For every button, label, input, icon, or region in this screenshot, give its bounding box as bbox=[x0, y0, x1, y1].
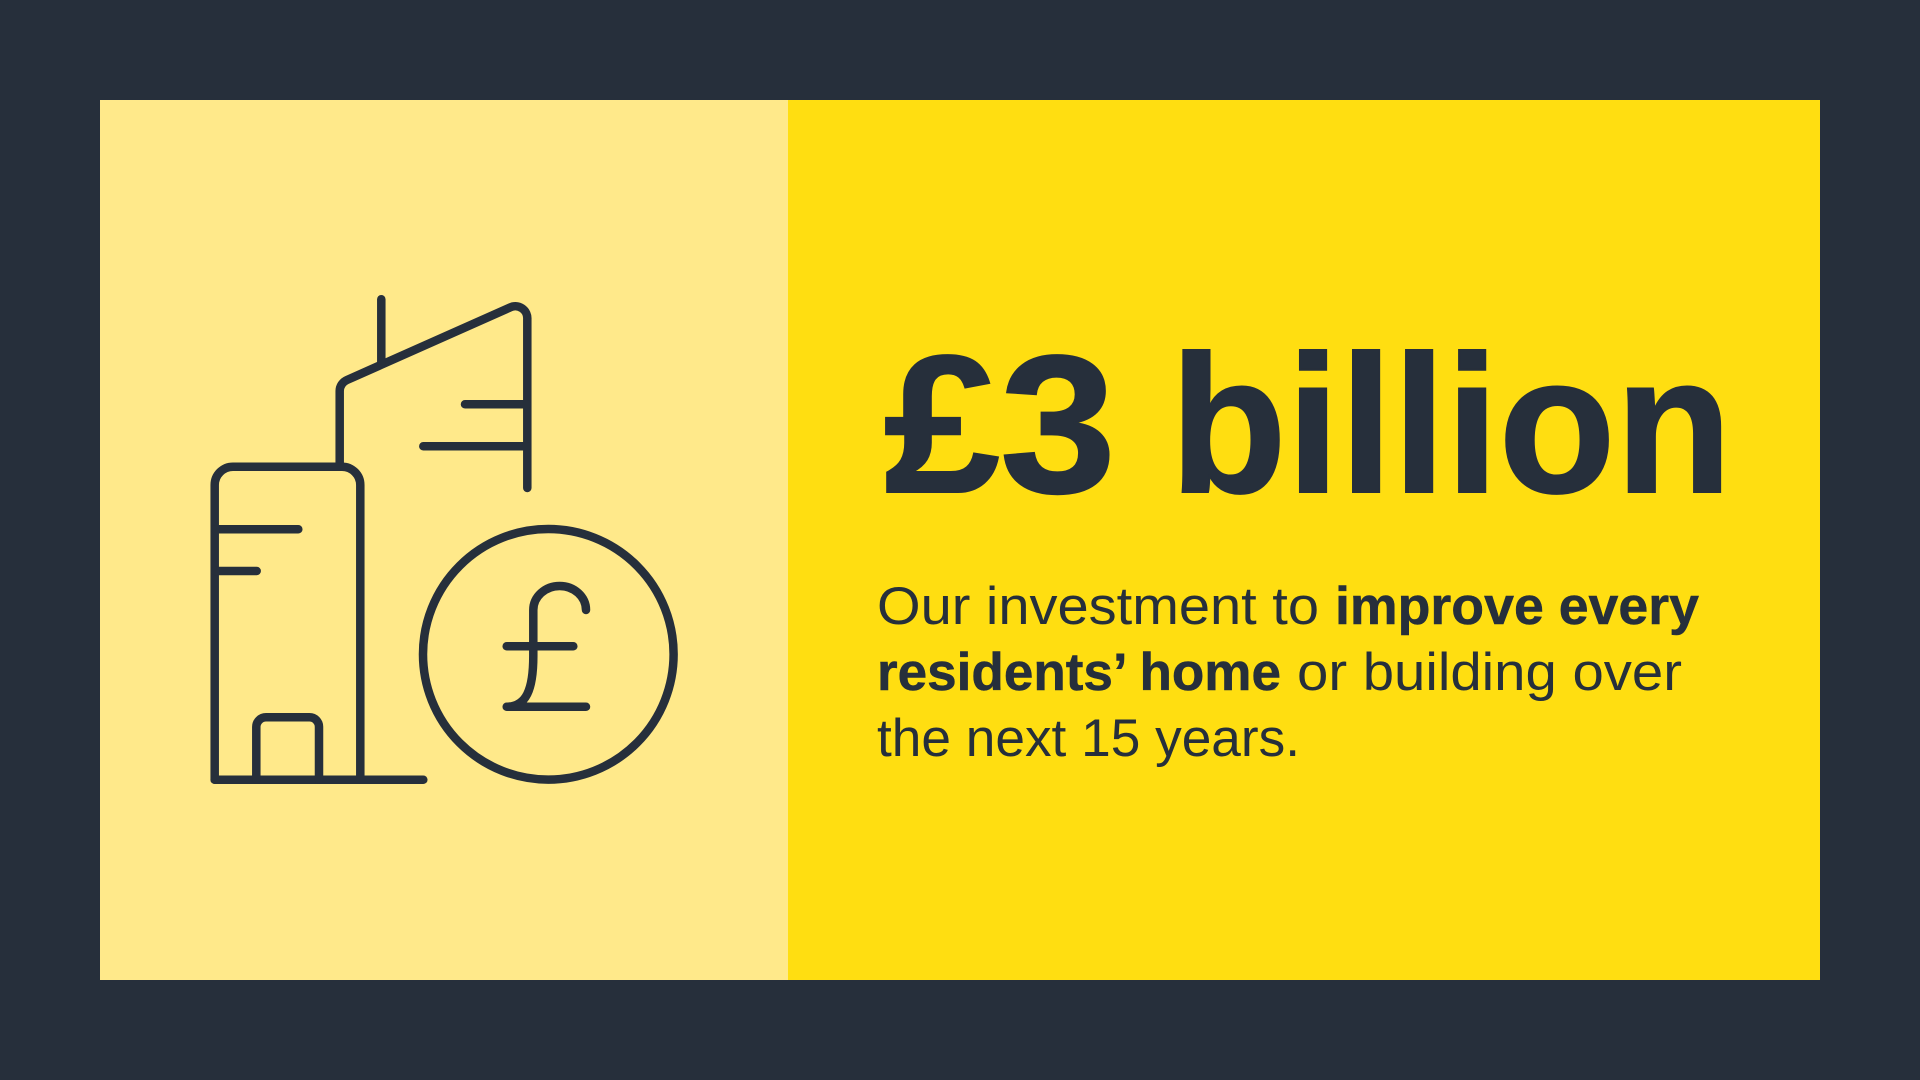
icon: pound coin bbox=[423, 529, 674, 780]
panel: statistic panel (bright yellow) bbox=[788, 100, 1820, 980]
text block: description: the next 15 years. bbox=[877, 709, 1300, 768]
text block: description: residents’ home bbox=[877, 643, 1281, 702]
text block: description bbox=[877, 577, 1700, 768]
heading: £3 billion: billion bbox=[1170, 315, 1732, 534]
text block: description: Our investment to bbox=[877, 577, 1319, 636]
panel: icon panel (pale yellow) bbox=[100, 100, 788, 980]
icon: buildings bbox=[215, 299, 527, 780]
heading: £3 billion: £3 bbox=[884, 315, 1116, 534]
text block: description: improve every bbox=[1335, 577, 1700, 636]
text block: description: or building over bbox=[1297, 643, 1682, 702]
